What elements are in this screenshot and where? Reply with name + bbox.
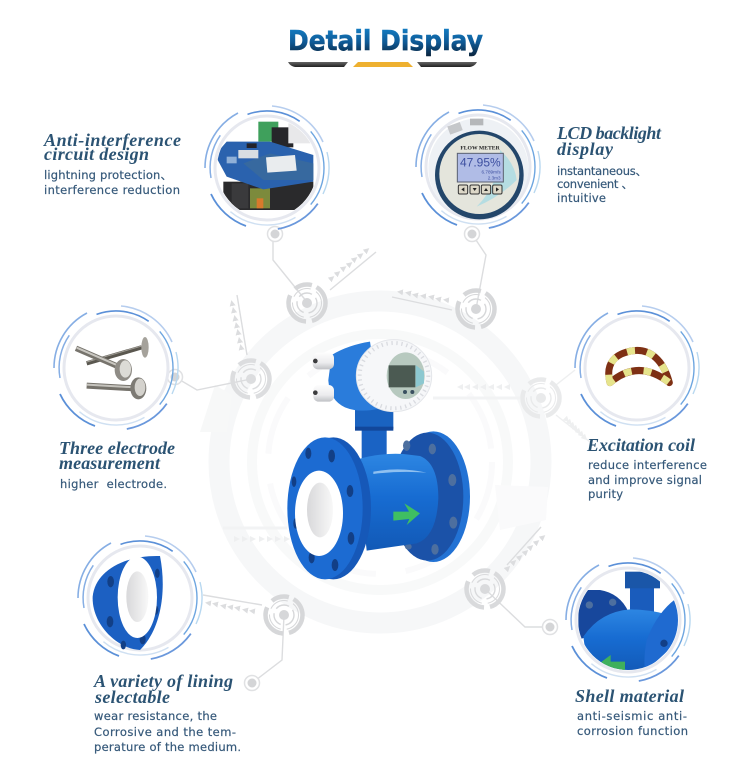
description: intuitive (557, 191, 606, 205)
connector lines and arrow trails (175, 234, 590, 683)
description: interference reduction (44, 183, 180, 197)
icon: flow meter display: 47.95% (460, 156, 501, 170)
neck and mounting collar (355, 405, 393, 458)
icon: circuit board (215, 122, 313, 210)
description: purity (588, 487, 623, 501)
white display cap (356, 340, 432, 412)
cable glands (313, 353, 334, 402)
description: lightning protection、 (44, 168, 172, 182)
heading: Anti-interference (43, 130, 181, 150)
icon: shell close-up (578, 572, 683, 673)
icon: coil (609, 350, 669, 383)
description: and improve signal (588, 473, 702, 487)
heading: display (557, 139, 614, 159)
panel: LCD backlight display (416, 105, 662, 228)
heading (43, 130, 181, 164)
description (557, 164, 647, 205)
description: anti-seismic anti- (577, 709, 687, 723)
ring frame (54, 306, 178, 429)
panel: three electrode measurement (54, 306, 178, 491)
description: corrosion function (577, 724, 688, 738)
heading: Excitation coil (586, 435, 695, 455)
icon: flow meter display: 6.789m/s (482, 169, 501, 174)
circuit nodes (168, 226, 560, 690)
heading: Three electrode (59, 438, 175, 458)
ring frame (575, 306, 699, 429)
title (288, 24, 483, 67)
description (44, 168, 180, 197)
ring frame (566, 558, 690, 681)
display window (387, 352, 425, 399)
description: perature of the medium. (94, 740, 241, 754)
heading: LCD backlight (556, 123, 662, 143)
title underline (288, 62, 477, 67)
description (588, 458, 707, 501)
heading: selectable (94, 687, 170, 707)
heading: measurement (59, 453, 161, 473)
panel: anti-interference circuit design (43, 106, 329, 229)
front flange (287, 437, 371, 579)
transmitter housing (328, 342, 380, 411)
description (577, 709, 688, 738)
heading (59, 438, 175, 473)
back flange (391, 431, 470, 562)
heading: A variety of lining (93, 671, 233, 691)
description: higher electrode. (60, 477, 167, 491)
background technical rings (200, 301, 548, 623)
heading (556, 123, 662, 159)
ring frame (416, 105, 540, 228)
description: wear resistance, the (94, 709, 217, 723)
pipe body (357, 454, 438, 551)
icon: flow meter display: FLOW METER (460, 145, 501, 151)
panel: excitation coil (575, 306, 707, 501)
icon: lined flange (93, 556, 163, 650)
description: convenient 、 (557, 177, 633, 191)
ring frame (78, 536, 202, 659)
description (94, 709, 241, 754)
description: reduce interference (588, 458, 707, 472)
green flow arrow (393, 503, 420, 525)
main product: electromagnetic flow meter (287, 340, 470, 579)
icon: electrode bolts (76, 337, 149, 399)
description: instantaneous、 (557, 164, 647, 178)
ring frame (205, 106, 329, 229)
icon: flow meter display: 2.3m3 (488, 175, 501, 180)
panel: variety of lining (78, 536, 241, 754)
icon: flow meter display (428, 118, 528, 219)
heading: circuit design (44, 144, 149, 164)
white lining (295, 471, 343, 556)
title text: Detail Display (288, 24, 483, 57)
description: Corrosive and the tem- (94, 725, 236, 739)
panel: shell material (566, 558, 690, 738)
pipe highlight (373, 469, 427, 474)
heading: Shell material (575, 686, 684, 706)
heading (93, 671, 233, 707)
